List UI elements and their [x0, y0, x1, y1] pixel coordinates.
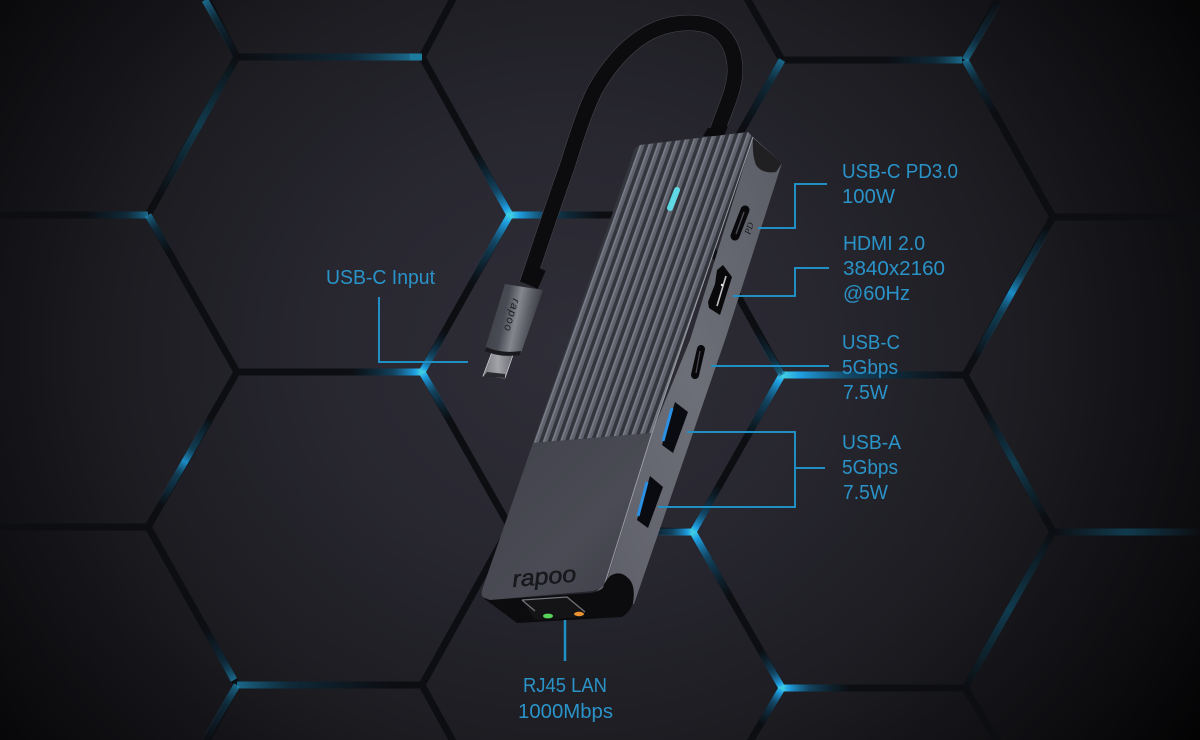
USB-A port 2 — [637, 476, 663, 528]
RJ45 LAN port — [522, 597, 585, 620]
callout: USB-A 5Gbps: 7.5W — [843, 482, 888, 504]
callout: HDMI 2.0: HDMI 2.0 — [843, 233, 925, 255]
callout: USB-C PD3.0: 100W — [842, 186, 895, 208]
callout: USB-C Input — [326, 267, 468, 362]
callout: RJ45 LAN: RJ45 LAN — [523, 675, 607, 697]
callout: USB-A 5Gbps — [658, 432, 902, 507]
status LED — [670, 190, 677, 208]
callout: USB-C 5Gbps: 7.5W — [843, 382, 888, 404]
USB-C 5Gbps port — [695, 349, 701, 375]
callout: HDMI 2.0: @60Hz — [843, 283, 910, 305]
ribbed top face — [533, 132, 753, 443]
callout: USB-C 5Gbps: USB-C — [842, 332, 900, 354]
flat lower top face — [482, 433, 652, 600]
callout: USB-C PD3.0 — [758, 161, 958, 228]
edge highlight — [605, 137, 753, 583]
callout: USB-A 5Gbps: 5Gbps — [842, 457, 898, 479]
callout: HDMI 2.0 — [733, 233, 945, 305]
callout: RJ45 LAN — [518, 620, 613, 723]
callout: USB-A 5Gbps: USB-A — [842, 432, 902, 454]
USB-C connector plug — [483, 284, 543, 378]
callout: HDMI 2.0: 3840x2160 — [843, 258, 945, 280]
side face with ports — [596, 137, 782, 604]
connector logo: rapoo — [501, 297, 522, 332]
callout: USB-C Input: USB-C Input — [326, 267, 435, 289]
USB-C PD port: PD — [742, 221, 756, 237]
dark end notch top — [753, 138, 782, 172]
callout: RJ45 LAN: 1000Mbps — [518, 701, 613, 723]
USB-A port 1 — [662, 402, 688, 453]
callout: USB-C 5Gbps — [711, 332, 900, 404]
cable — [527, 23, 735, 285]
callout: USB-C 5Gbps: 5Gbps — [842, 357, 898, 379]
USB-C PD port — [735, 210, 756, 237]
rear end cutout and black front face — [482, 573, 634, 623]
HDMI port — [708, 265, 732, 315]
callout: USB-C PD3.0: USB-C PD3.0 — [842, 161, 958, 183]
USB-C hub device — [482, 23, 782, 623]
brand logo: rapoo — [511, 560, 577, 592]
